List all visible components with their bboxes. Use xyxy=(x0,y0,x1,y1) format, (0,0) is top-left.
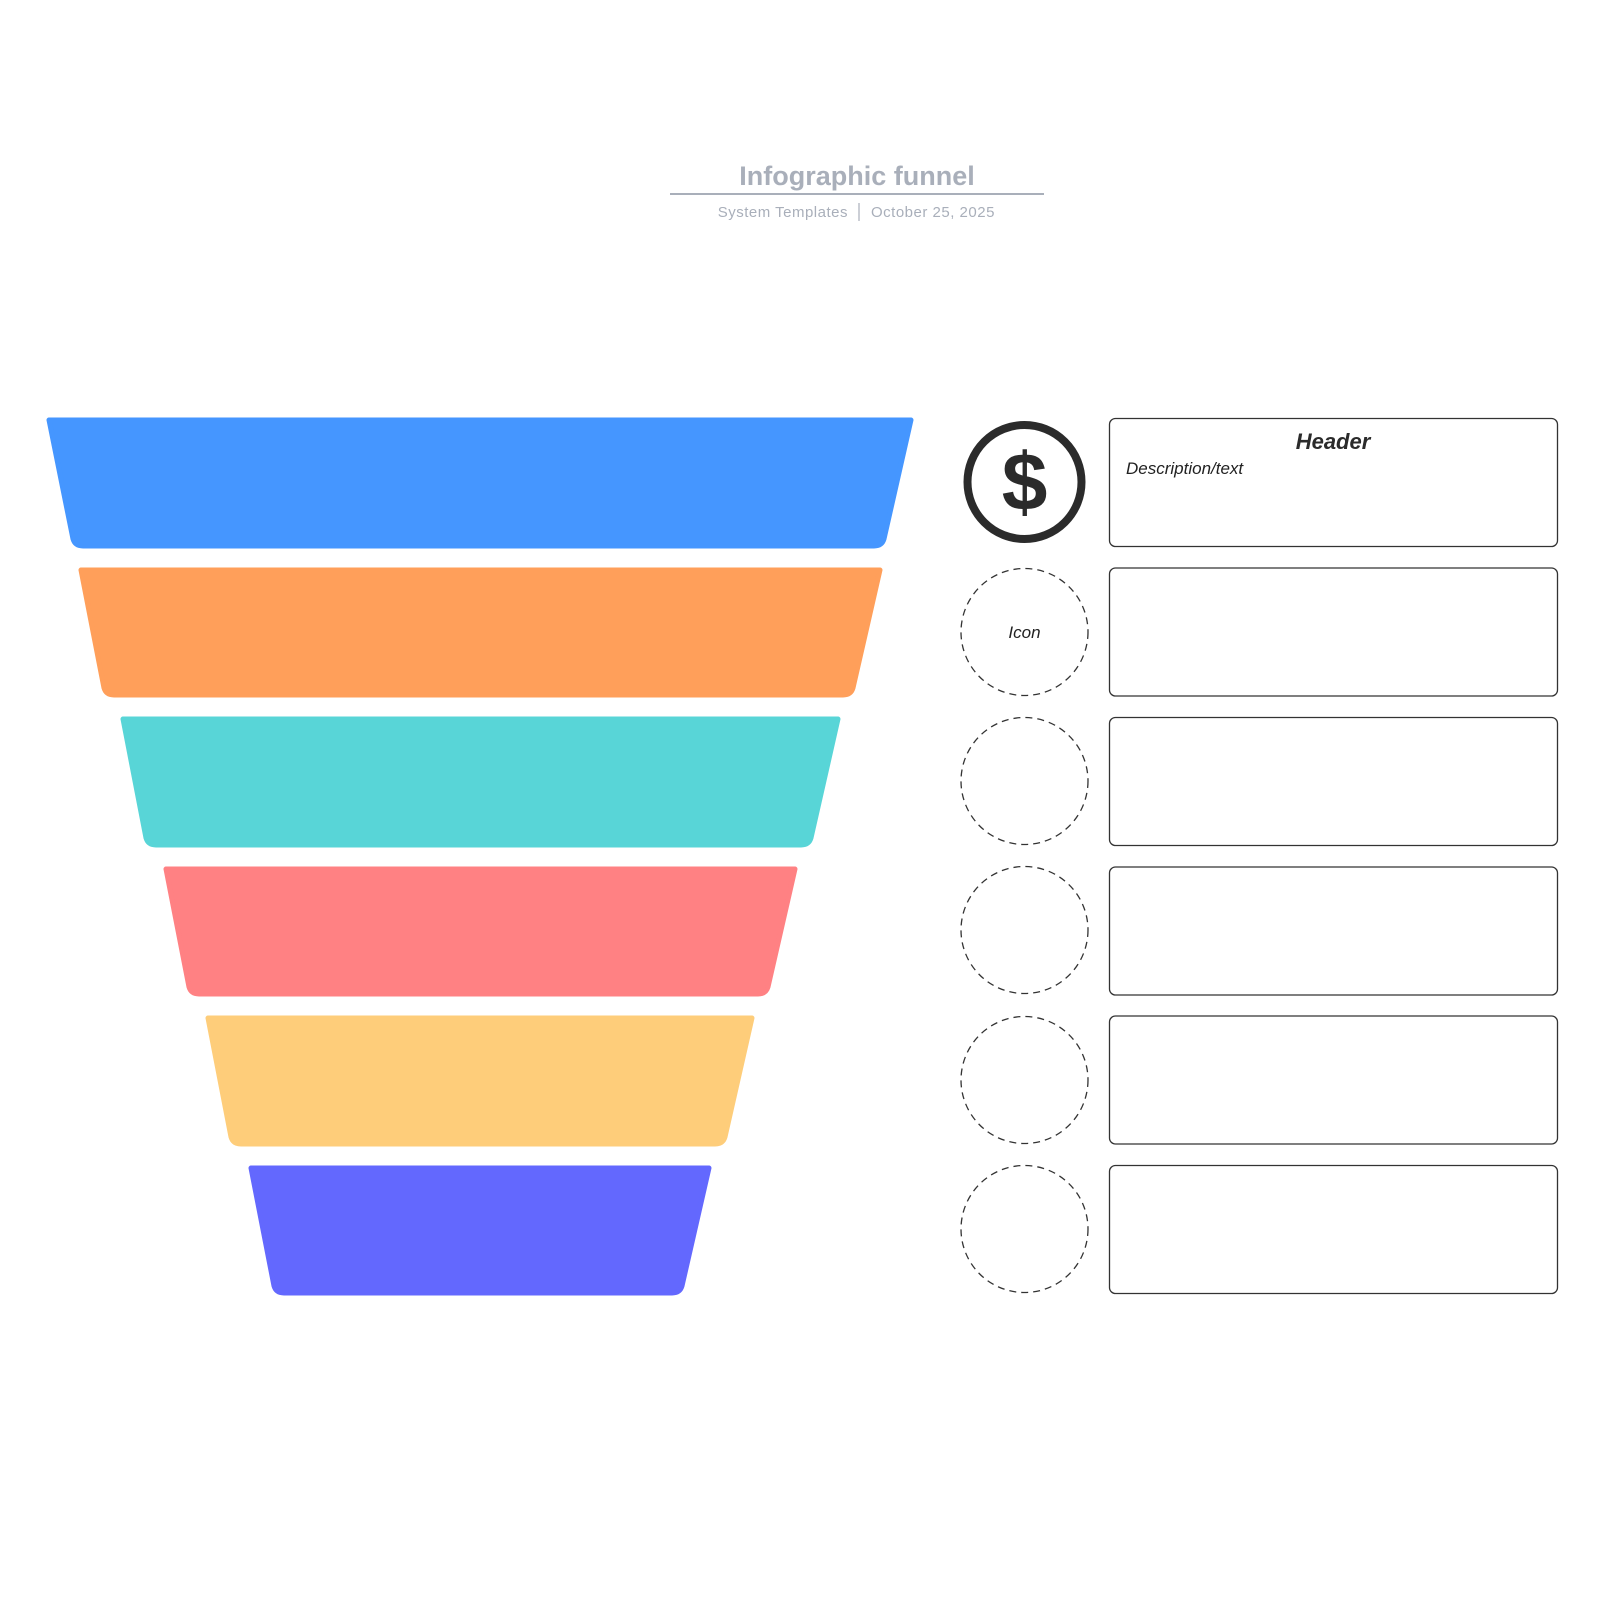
text box 3 xyxy=(1110,718,1558,846)
text box 5 xyxy=(1110,1016,1558,1144)
funnel stage 1 xyxy=(49,420,911,546)
icon placeholder 2 xyxy=(961,568,1088,696)
funnel stage 5 xyxy=(208,1018,752,1144)
funnel stage 3 xyxy=(123,719,838,845)
icon placeholder 4 xyxy=(961,866,1088,994)
funnel xyxy=(49,420,911,1293)
funnel stage 2 xyxy=(81,570,880,695)
text box 1 xyxy=(1110,418,1558,546)
subtitle xyxy=(718,203,995,221)
subtitle: System Templates xyxy=(718,204,848,221)
title: Infographic funnel xyxy=(739,161,975,191)
icon placeholder 3 xyxy=(961,718,1088,844)
header text: Header xyxy=(1296,429,1372,454)
description text: Description/text xyxy=(1126,459,1244,478)
icon: dollar xyxy=(968,425,1082,539)
funnel stage 6 xyxy=(251,1168,709,1293)
text box 2 xyxy=(1110,568,1558,696)
funnel stage 4 xyxy=(166,869,795,994)
text box 4 xyxy=(1110,867,1558,995)
subtitle: October 25, 2025 xyxy=(871,204,995,221)
icon: dollar: $ xyxy=(1002,437,1047,528)
text box 6 xyxy=(1110,1166,1558,1294)
icon placeholder 2: Icon xyxy=(1008,623,1041,642)
icon placeholder 6 xyxy=(961,1166,1088,1292)
icon placeholder 5 xyxy=(961,1016,1088,1144)
